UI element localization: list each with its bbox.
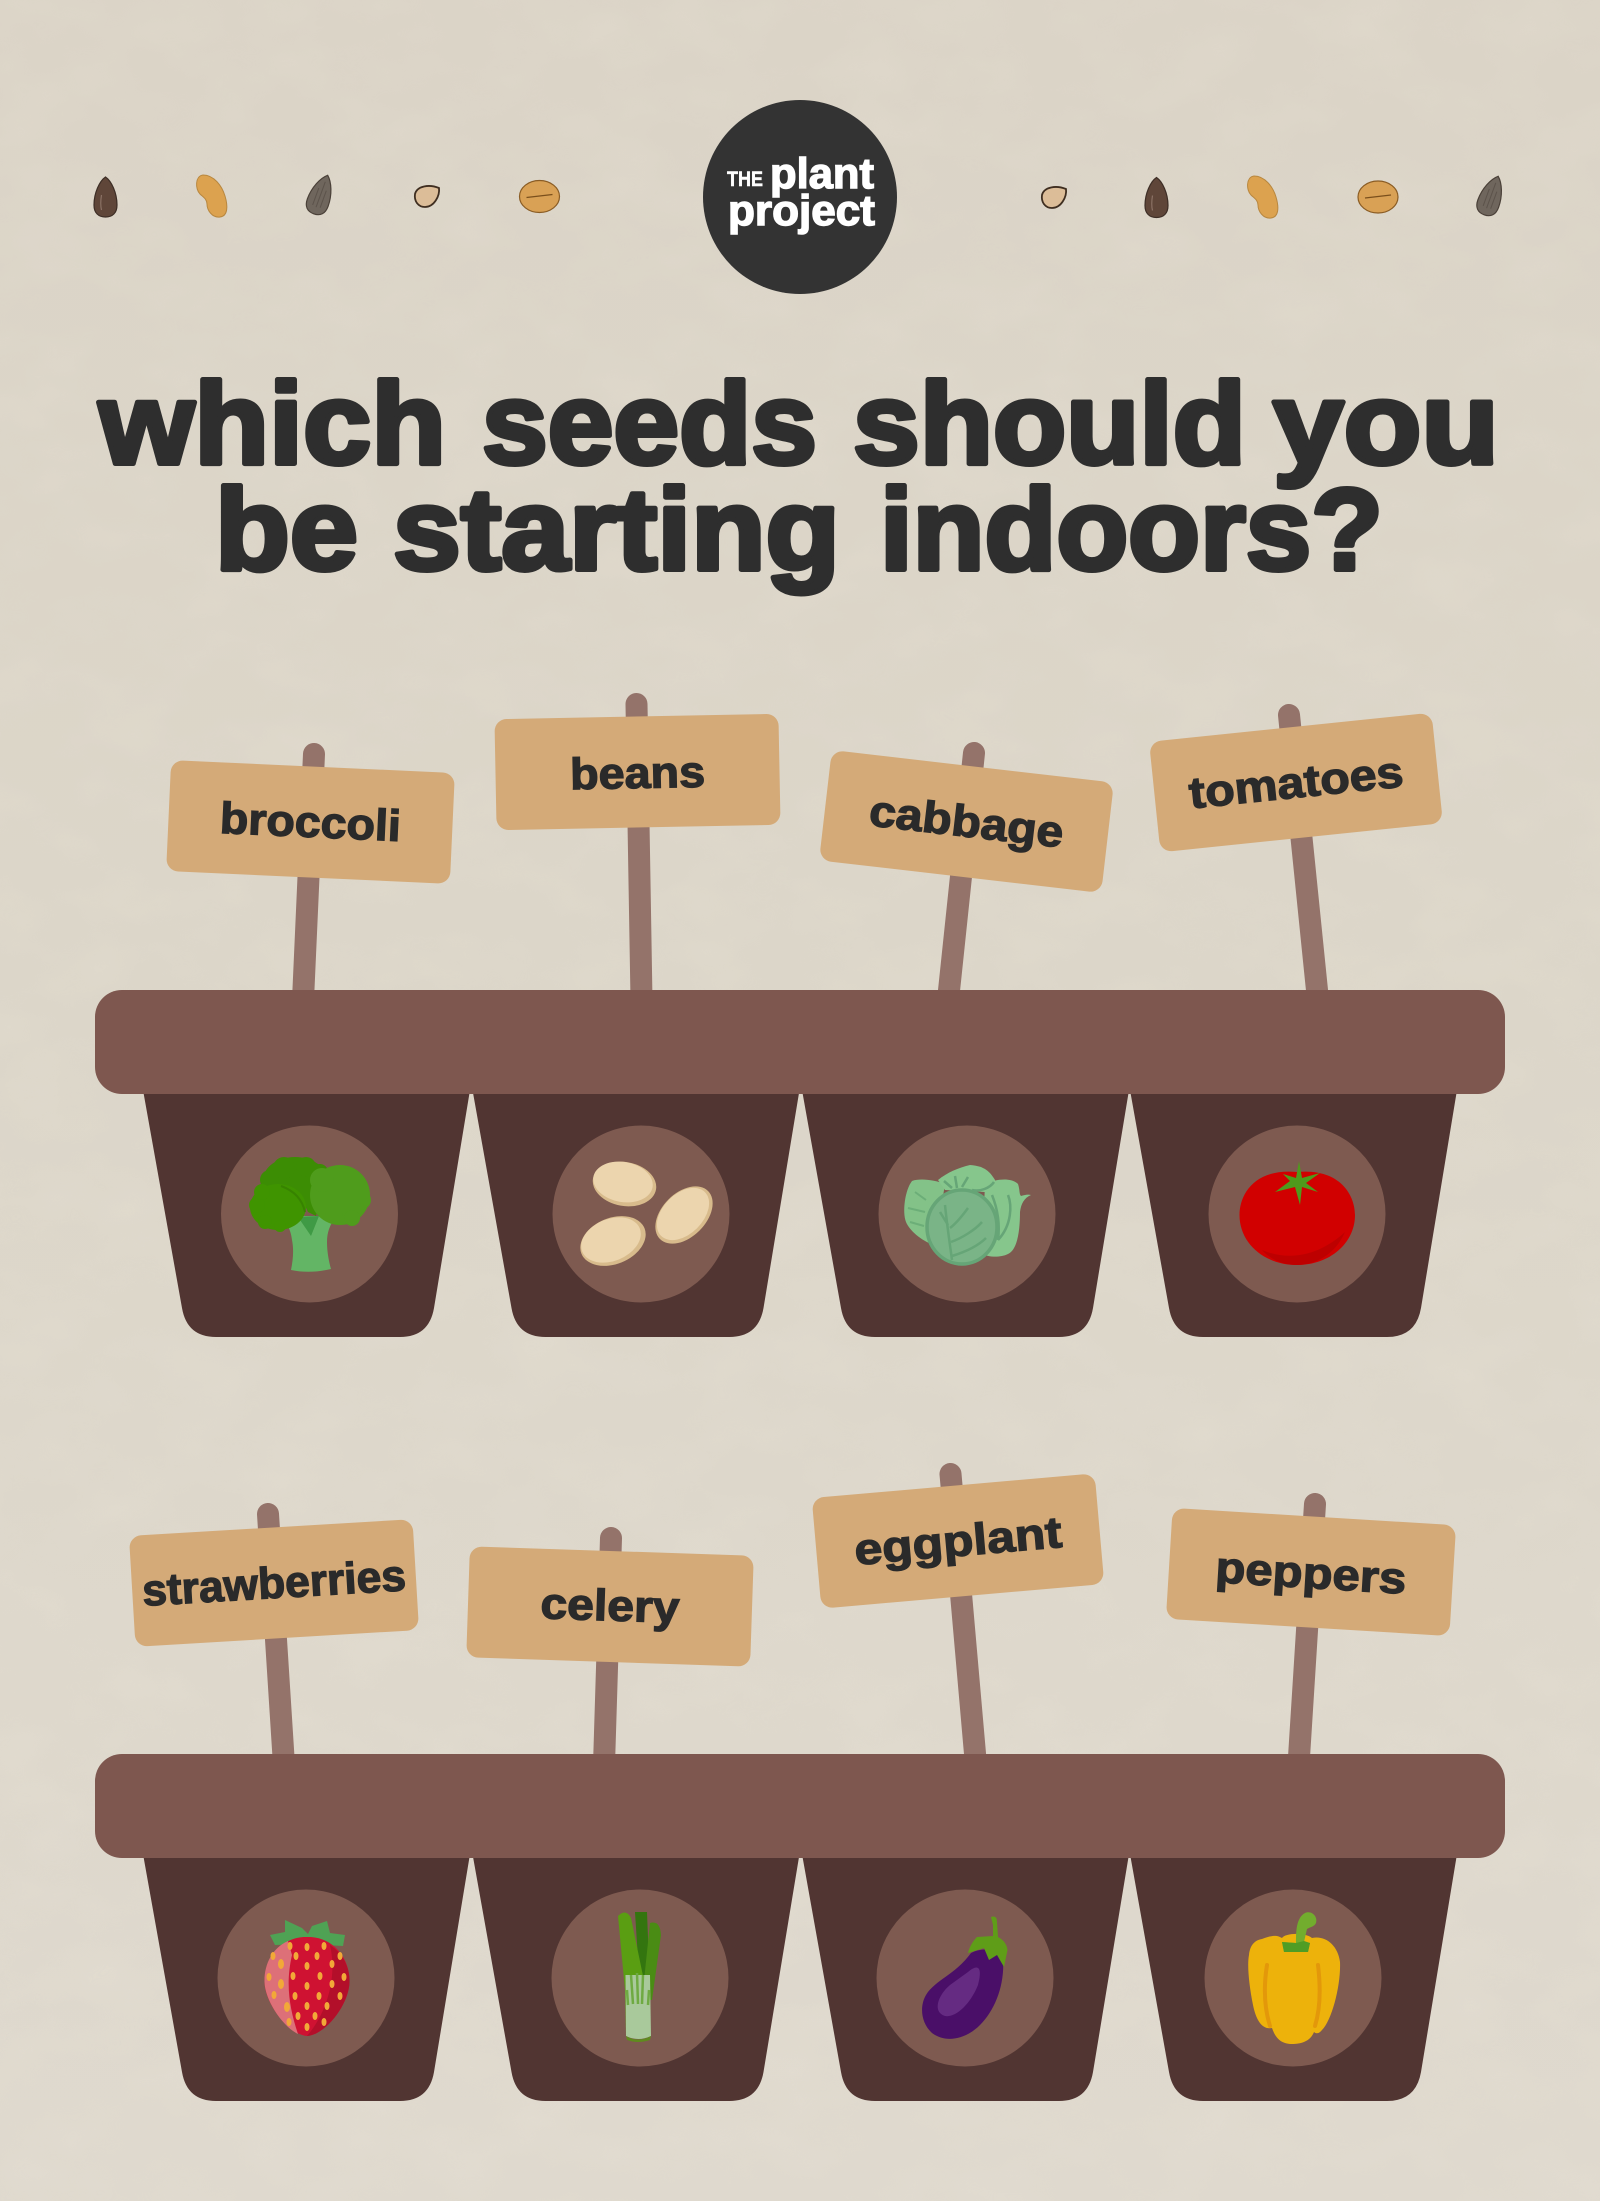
icon: chickpea seed [520,180,560,212]
icon: orange bean [197,175,227,217]
sign: broccoli [166,760,455,884]
sign: peppers: peppers [1214,1543,1408,1604]
sign: strawberries [129,1519,419,1647]
plant marker posts [303,704,1318,1000]
right outer leaf [982,1180,1031,1257]
sign: tomatoes: tomatoes [1187,748,1406,818]
top leaf [938,1165,995,1192]
left outer leaf [904,1180,945,1245]
icon: dark seed [94,177,117,217]
icon: celery [552,1890,728,2066]
icon: cabbage [878,1126,1056,1302]
icon: orange bean [1248,176,1278,218]
icon: chickpea seed [1358,181,1398,213]
icon: broccoli [221,1126,398,1302]
sign: cabbage [819,750,1114,893]
icon: small tan seed [415,186,439,207]
icon: small tan seed [1042,187,1066,208]
pot rim [95,1754,1505,1858]
icon: tomato [1208,1126,1386,1302]
icon: eggplant [876,1890,1054,2066]
logo wordmark [727,150,875,235]
icon: yellow pepper [1204,1890,1382,2066]
icon: beans [552,1126,730,1302]
pot rim [95,990,1505,1094]
panel: bottom row of pots [95,1473,1505,2101]
sign: cabbage: cabbage [867,786,1066,858]
logo wordmark: plant [770,150,874,198]
icon: strawberry [218,1890,394,2066]
title [98,358,1499,594]
logo wordmark: THE [727,168,763,191]
sign: eggplant [812,1473,1104,1609]
logo wordmark: project [728,187,875,235]
icon: striped seed [1474,173,1509,219]
title: indoors? [880,464,1383,594]
sign: beans: beans [570,748,705,799]
pots [143,1090,1457,1337]
seed row: right [1042,173,1509,219]
title: which [98,358,446,488]
sign: peppers [1166,1508,1456,1636]
title: be [215,464,358,594]
plant marker posts [268,1474,1315,1765]
seed row: left [94,172,560,218]
sign: celery: celery [540,1579,681,1633]
sign: eggplant: eggplant [852,1508,1064,1575]
icon: dark seed [1145,178,1168,218]
sign: beans [494,714,781,830]
title: starting [393,464,840,594]
pots [143,1854,1457,2101]
panel: top row of pots [95,704,1505,1337]
sign: celery [466,1546,754,1667]
title: should [853,358,1246,488]
icon: striped seed [303,172,338,218]
head [927,1190,997,1264]
sign: broccoli: broccoli [219,794,402,851]
sign: strawberries: strawberries [141,1551,407,1616]
title: you [1273,358,1499,488]
title: seeds [482,358,817,488]
sign: tomatoes [1149,713,1443,852]
logo badge [703,100,897,294]
